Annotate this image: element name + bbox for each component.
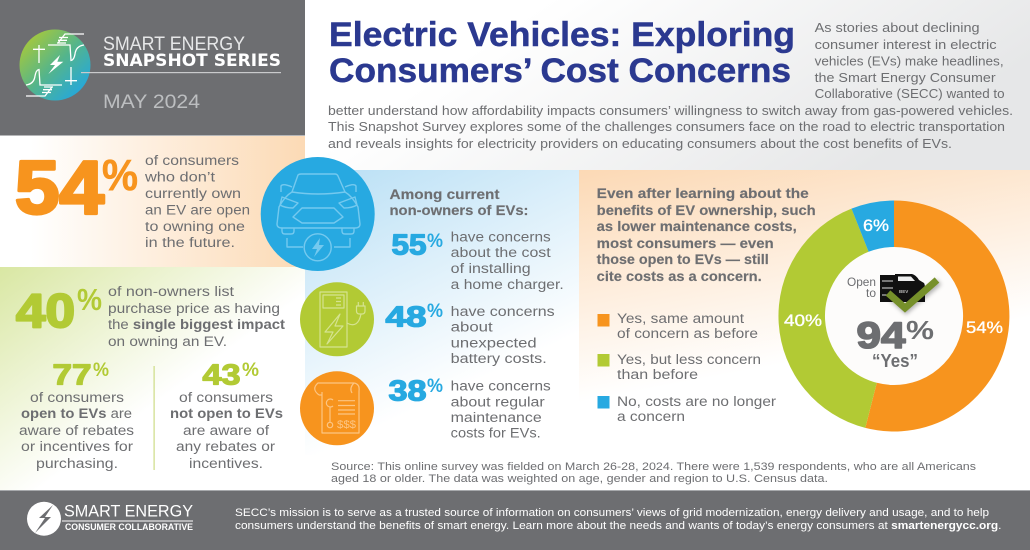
donut segment: 6% blue [852, 200, 894, 252]
heading: even after learning: benefits of EV ownership, such [597, 203, 816, 218]
legend item: same amount of concern [598, 311, 758, 341]
text: 40 percent description: on owning an EV. [108, 334, 227, 349]
panel: non-owner concerns [305, 170, 579, 455]
heading: even after learning: cite costs as a concern. [597, 269, 762, 284]
text: 48 percent description: have concerns [451, 304, 555, 319]
icon: smart energy logo mark [27, 502, 61, 536]
text: source note: Source: This online survey was fielded on March 26-28, 2024. There were 1,539 respondents, who are all Americans [331, 461, 977, 473]
stat: 55% [392, 230, 443, 262]
text: 77 percent description: purchasing. [36, 456, 118, 471]
panel: cost concern after learning benefits [579, 170, 1030, 455]
center: 94% yes [856, 315, 934, 371]
icon: smart energy logo [20, 30, 90, 100]
text: 77 percent description: open to EVs are [21, 406, 132, 421]
stat: 55%: % [427, 231, 443, 252]
label: 6%: 6% [863, 217, 889, 235]
heading: even after learning: as lower maintenance costs, [597, 219, 797, 234]
stat: 55%: 55 [392, 230, 426, 262]
label: 54%: 54% [966, 319, 1003, 337]
text: introduction: This Snapshot Survey explores some of the challenges consumers face on the road to electric transportation [328, 120, 1005, 134]
panel: purchase price and incentives [0, 267, 305, 490]
footer logo wordmark [62, 502, 193, 533]
center: open to EV icon: Open [847, 277, 876, 289]
text: 38 percent description: costs for EVs. [451, 426, 541, 441]
stat: 40% [16, 282, 102, 337]
stat: 43% [202, 360, 259, 392]
text: 43 percent description [170, 390, 283, 471]
text: 77 percent description: of consumers [30, 390, 124, 405]
text: 38 percent description: about regular [451, 395, 545, 410]
text: 55 percent description: a home charger. [451, 277, 564, 292]
label: 40%: 40% [784, 312, 822, 330]
legend item: no longer a concern: a concern [617, 409, 685, 424]
legend item: no longer a concern [598, 394, 777, 424]
text: 38 percent description [451, 379, 551, 441]
text: 77 percent description [19, 390, 134, 471]
text: 54 percent description: who don’t [144, 170, 215, 184]
legend item: less concern: than before [617, 367, 698, 382]
text: 77 percent description: or incentives for [21, 439, 134, 454]
text: introduction: and reveals insights for electricity providers on educating consumers about the cost benefits of EVs. [328, 137, 952, 151]
text: 40 percent description [108, 284, 286, 349]
title [329, 16, 795, 90]
stat: 54% [15, 146, 138, 230]
text: 54 percent description [144, 153, 250, 250]
text: 54 percent description: currently own [145, 186, 241, 201]
heading: among current non-owners: Among current [390, 187, 500, 202]
center: 94% yes: 94 [856, 315, 906, 356]
stat: 54%: 54 [15, 146, 104, 230]
icon: check mark [888, 280, 939, 310]
text: source note: aged 18 or older. The data was weighted on age, gender and region to U.S. Census data. [331, 473, 828, 485]
icon: maintenance bill in orange circle: $$$ [337, 419, 356, 431]
stat: 38%: % [427, 376, 443, 397]
stat: 48%: % [427, 301, 443, 322]
stat: 48% [386, 301, 443, 334]
text: mission statement [235, 507, 1002, 532]
text: 55 percent description: of installing [451, 261, 531, 276]
text: introduction: consumer interest in electric [815, 38, 997, 52]
series title: SNAPSHOT SERIES [103, 51, 281, 70]
stat: 77% [52, 360, 109, 392]
stat: 77%: % [93, 360, 109, 381]
text: mission statement: SECC’s mission is to serve as a trusted source of information on consumers’ views of grid modernization, energy delivery and usage, and to help [235, 507, 989, 519]
text: introduction: vehicles (EVs) make headlines, [815, 54, 1004, 68]
donut segment: 40% green [778, 209, 877, 428]
stat: 43%: 43 [202, 360, 240, 392]
text: 55 percent description: about the cost [451, 245, 551, 260]
center: 94% yes: “Yes” [872, 351, 918, 371]
legend item: same amount of concern: of concern as before [617, 326, 758, 341]
text: 48 percent description: battery costs. [451, 351, 547, 366]
heading: even after learning [597, 186, 816, 284]
text: introduction: As stories about declining [815, 21, 980, 35]
text: 43 percent description: not open to EVs [170, 406, 283, 421]
panel: title background [305, 0, 1030, 170]
text: 43 percent description: are aware of [183, 423, 269, 438]
chart: donut of cost concern [778, 200, 1009, 431]
heading: even after learning: Even after learning about the [597, 186, 809, 201]
text: 54 percent description: an EV are open [145, 202, 250, 218]
text: 54 percent description: of consumers [145, 153, 239, 168]
text: 54 percent description: to owning one [145, 219, 245, 234]
text: 38 percent description: maintenance [451, 410, 542, 425]
text: 43 percent description: incentives. [189, 456, 263, 471]
text: mission statement: consumers understand the benefits of smart energy. Learn more about the needs and wants of today’s energy consumers at smartenergycc.org . [235, 520, 1002, 532]
text: introduction: better understand how affordability impacts consumers’ willingness to switch away from gas-powered vehicles. [328, 104, 1013, 118]
footer logo wordmark: CONSUMER COLLABORATIVE [65, 522, 193, 533]
panel: series header [0, 0, 305, 135]
center: 94% yes: % [906, 315, 934, 345]
legend [598, 311, 777, 424]
date: MAY 2024 [103, 92, 200, 113]
text: 40 percent description: the single biggest impact [108, 317, 286, 332]
title: Electric Vehicles: Exploring [329, 16, 795, 54]
heading: among current non-owners [390, 187, 528, 218]
text: 77 percent description: aware of rebates [19, 423, 134, 438]
stat: 40%: % [77, 282, 102, 317]
icon: electric car in blue circle [261, 157, 375, 271]
legend item: less concern: Yes, but less concern [617, 352, 761, 367]
text: 43 percent description: any rebates or [176, 439, 276, 454]
text: 38 percent description: have concerns [451, 379, 551, 394]
text: source note [331, 461, 977, 485]
footer logo wordmark: SMART ENERGY [64, 502, 193, 520]
text: 40 percent description: purchase price as having [108, 301, 280, 316]
text: 48 percent description: about [451, 320, 493, 335]
donut segment: 54% orange [865, 200, 1009, 431]
panel: footer [0, 490, 1030, 550]
legend item: less concern [598, 352, 761, 382]
stat: 38%: 38 [388, 376, 426, 408]
series title [81, 34, 281, 73]
heading: even after learning: most consumers — even [597, 236, 774, 251]
stat: 43%: % [242, 360, 259, 381]
heading: among current non-owners: non-owners of EVs: [390, 203, 528, 218]
legend item: no longer a concern: No, costs are no longer [617, 394, 777, 409]
text: 48 percent description: unexpected [451, 336, 537, 351]
text: introduction: the Smart Energy Consumer [815, 71, 996, 85]
text: introduction [328, 21, 1013, 151]
text: 40 percent description: of non-owners list [108, 284, 234, 299]
icon: EV battery car: BEV [899, 289, 908, 294]
text: 55 percent description [451, 230, 564, 292]
series title: SMART ENERGY [103, 34, 245, 55]
center: open to EV icon: to [866, 288, 876, 300]
stat: 77%: 77 [52, 360, 92, 392]
text: 43 percent description: of consumers [179, 390, 273, 405]
text: 55 percent description: have concerns [451, 230, 551, 244]
stat: 40%: 40 [16, 284, 75, 337]
text: introduction: Collaborative (SECC) wanted to [815, 87, 1005, 101]
title: Consumers’ Cost Concerns [329, 52, 791, 90]
legend item: same amount of concern: Yes, same amount [617, 311, 744, 326]
stat: 48%: 48 [386, 302, 426, 334]
icon: maintenance bill in orange circle [300, 371, 374, 445]
icon: charging station in green circle [300, 282, 374, 356]
center: open to EV icon [847, 274, 939, 310]
text: 54 percent description: in the future. [145, 235, 235, 250]
panel: 54 percent open [0, 136, 305, 267]
text: 48 percent description [451, 304, 555, 366]
stat: 38% [388, 376, 443, 408]
stat: 54%: % [102, 151, 138, 200]
heading: even after learning: those open to EVs — still [597, 252, 769, 267]
